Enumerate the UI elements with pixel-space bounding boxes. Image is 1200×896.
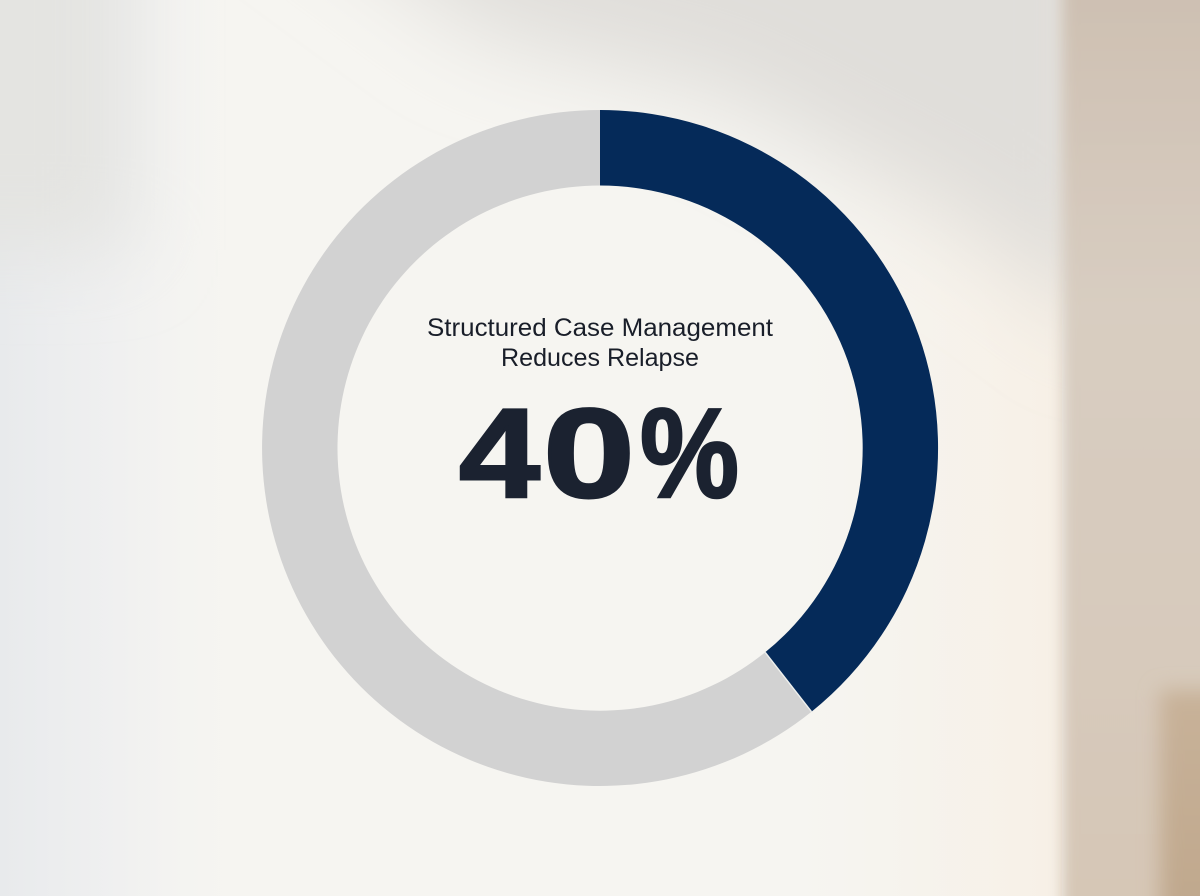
chart heading: Reduces Relapse — [501, 344, 699, 372]
chart heading — [427, 314, 773, 372]
segment divider: lower — [765, 652, 812, 712]
donut remainder segment: 60% — [262, 110, 812, 786]
chart heading: Structured Case Management — [427, 314, 773, 342]
donut highlighted segment: 40% — [600, 110, 938, 712]
big number: 40%: 0 — [543, 382, 635, 524]
donut chart — [262, 110, 938, 786]
big number: 40%: 4 — [459, 382, 540, 524]
big number: 40%: % — [640, 382, 739, 524]
